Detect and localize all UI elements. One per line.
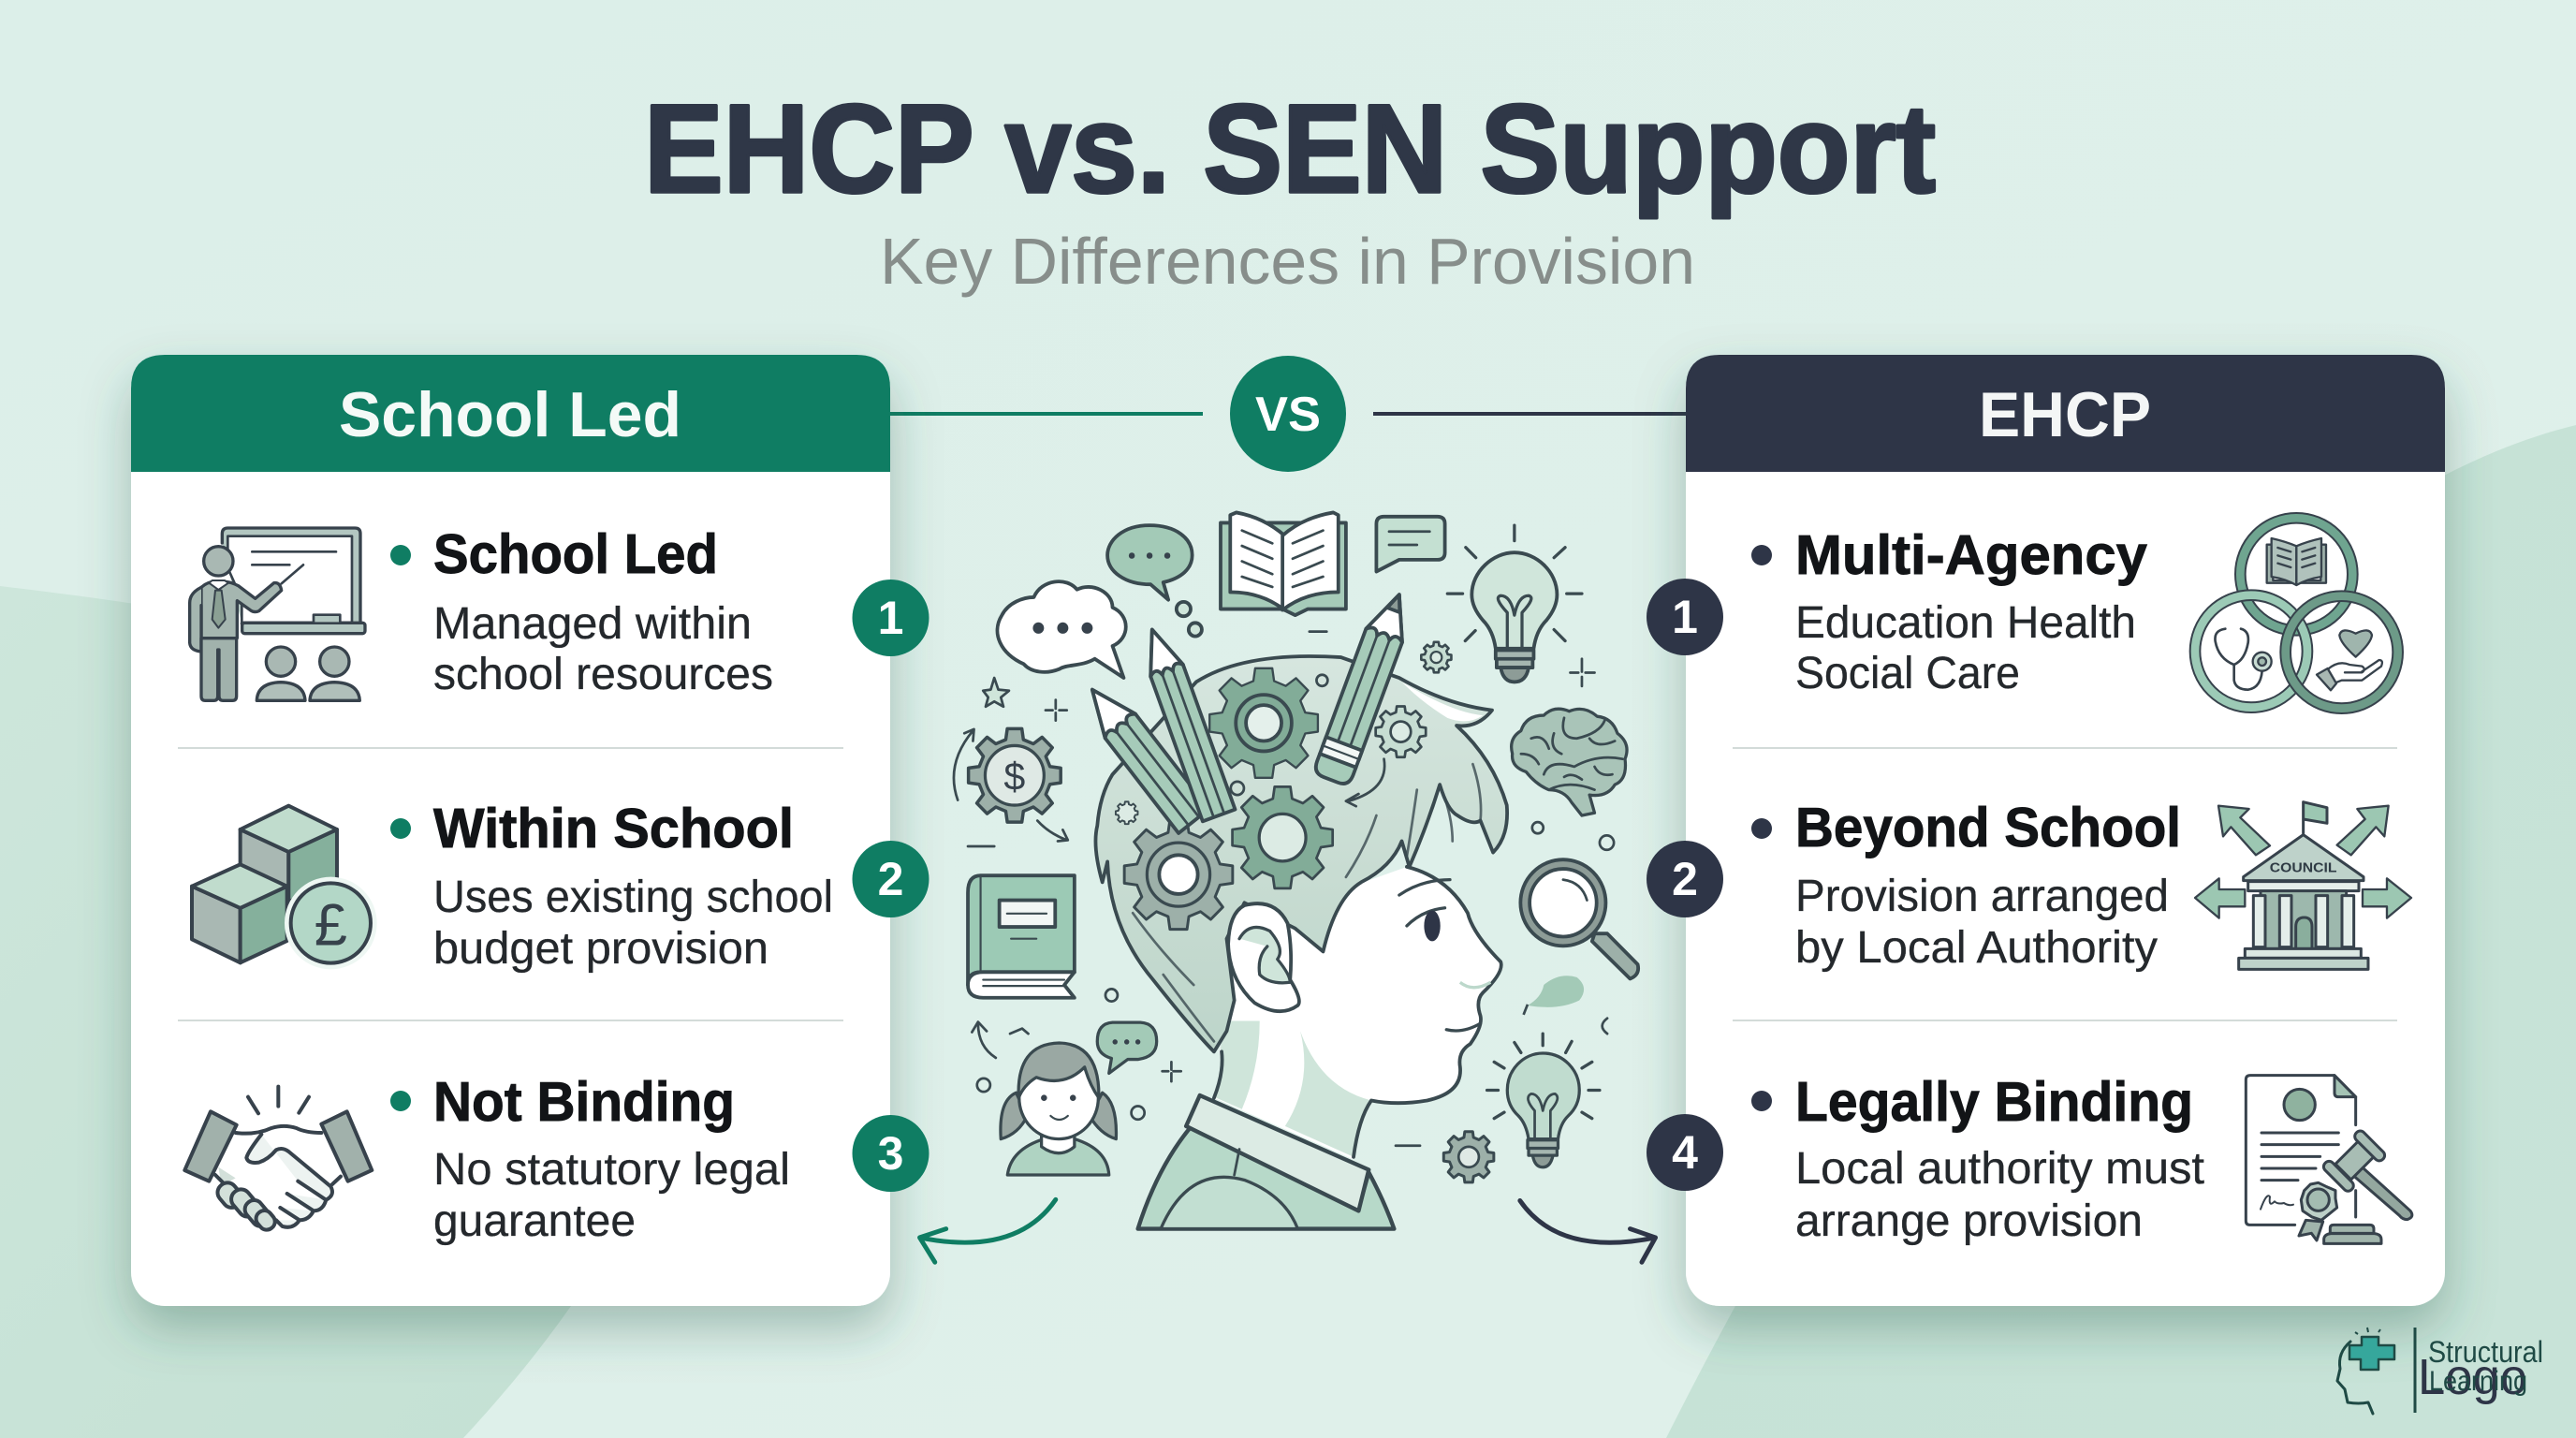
icon: blocks with pound coin <box>192 806 377 969</box>
bullet and text: School Led: School Led <box>433 523 718 585</box>
hair <box>1095 656 1507 1051</box>
small decorations <box>968 632 1614 1146</box>
connector lines and VS badge: VS <box>1255 388 1321 442</box>
thought cloud <box>997 581 1126 678</box>
panel header: EHCP <box>1686 355 2445 472</box>
bullet and text: Beyond School <box>1751 797 2181 973</box>
number badges: right column: 2 <box>1672 853 1698 905</box>
icon: council building with arrows <box>2195 802 2411 969</box>
icon: brain <box>1512 709 1627 815</box>
collar and shoulder <box>1138 1095 1394 1229</box>
panel header: School Led: School Led <box>339 379 681 450</box>
number badges: right column: 1 <box>1672 591 1698 643</box>
title: EHCP vs. SEN Support <box>644 80 1936 219</box>
bullet and text: Not Binding: No statutory legal <box>433 1145 790 1195</box>
icon: open book <box>1221 512 1346 615</box>
number badges: left column: 3 <box>878 1127 903 1180</box>
bullet and text: School Led: Managed within <box>433 599 752 649</box>
leaf bubble <box>1524 976 1584 1015</box>
icon: lightbulb lower right <box>1487 1034 1600 1167</box>
icon: dollar gear <box>954 728 1068 841</box>
bullet and text: Beyond School: Beyond School <box>1795 797 2181 858</box>
connector lines and VS badge <box>890 356 1686 472</box>
bullet and text: Within School <box>390 798 833 974</box>
bullet and text: Multi-Agency: Social Care <box>1795 649 2020 698</box>
gears in head <box>1116 668 1426 930</box>
bullet and text: Not Binding: guarantee <box>433 1196 636 1246</box>
icon: teacher at whiteboard <box>190 528 365 700</box>
bullet and text: Within School: Uses existing school <box>433 873 833 922</box>
logo <box>2337 1328 2543 1414</box>
bullet and text: Not Binding <box>390 1071 790 1246</box>
pencil left <box>1077 678 1209 833</box>
icon: legal document with gavel <box>2246 1076 2412 1243</box>
icon: closed book <box>968 875 1075 998</box>
icon: blocks with pound coin: £ <box>315 892 347 958</box>
icon: handshake <box>184 1087 372 1233</box>
icon: council building with arrows: COUNCIL <box>2270 861 2337 876</box>
speech bubble: top <box>1107 525 1202 637</box>
bullet and text: Multi-Agency: Multi-Agency <box>1795 524 2147 586</box>
bullet and text: School Led <box>390 523 773 699</box>
bullet and text: Multi-Agency: Education Health <box>1795 598 2136 648</box>
number badges: left column <box>852 580 929 1192</box>
bullet and text: Within School: budget provision <box>433 924 768 974</box>
ear <box>1228 903 1299 1011</box>
bullet and text: Legally Binding: Legally Binding <box>1795 1071 2193 1133</box>
arrow: green curved left <box>920 1199 1056 1262</box>
arrow: dark curved right <box>1520 1200 1656 1262</box>
panel header: EHCP: EHCP <box>1979 379 2151 450</box>
central illustration: child profile with ideas <box>920 512 1656 1262</box>
pencil right <box>1312 588 1417 786</box>
bullet and text: Legally Binding <box>1751 1071 2204 1246</box>
number badges: left column: 1 <box>878 592 903 644</box>
neck and face <box>1214 867 1501 1160</box>
number badges: left column: 2 <box>878 853 903 905</box>
panel: School Led <box>131 355 890 1306</box>
bullet and text: Beyond School: Provision arranged <box>1795 872 2169 921</box>
logo: Learning <box>2429 1366 2527 1397</box>
bullet and text: Beyond School: by Local Authority <box>1795 923 2158 973</box>
bullet and text: Not Binding: Not Binding <box>433 1071 735 1133</box>
speech bubble: lower <box>972 1022 1157 1073</box>
icon: girl <box>1001 1043 1116 1175</box>
number badges: right column <box>1647 579 1723 1191</box>
bullet and text: School Led: school resources <box>433 650 773 699</box>
small gear top <box>1421 642 1451 672</box>
number badges: right column: 4 <box>1672 1126 1698 1179</box>
pencil middle <box>1135 624 1236 821</box>
icon: three overlapping agency circles <box>2195 518 2398 709</box>
bullet and text: Within School: Within School <box>433 798 794 859</box>
panel header: School Led <box>131 355 890 472</box>
icon: gear lower right <box>1443 1132 1494 1182</box>
panel: EHCP <box>1686 355 2445 1306</box>
icon: dollar gear: $ <box>1003 754 1025 799</box>
bullet and text: Legally Binding: arrange provision <box>1795 1196 2143 1246</box>
icon: magnifying glass <box>1520 859 1638 978</box>
bullet and text: Multi-Agency <box>1751 524 2147 698</box>
logo: Structural <box>2428 1335 2543 1369</box>
bullet and text: Legally Binding: Local authority must <box>1795 1144 2204 1194</box>
logo: Logo <box>2418 1349 2527 1405</box>
icon: lightbulb top right <box>1447 525 1582 682</box>
speech bubble: rectangular <box>1376 517 1445 572</box>
subtitle: Key Differences in Provision <box>880 225 1695 298</box>
